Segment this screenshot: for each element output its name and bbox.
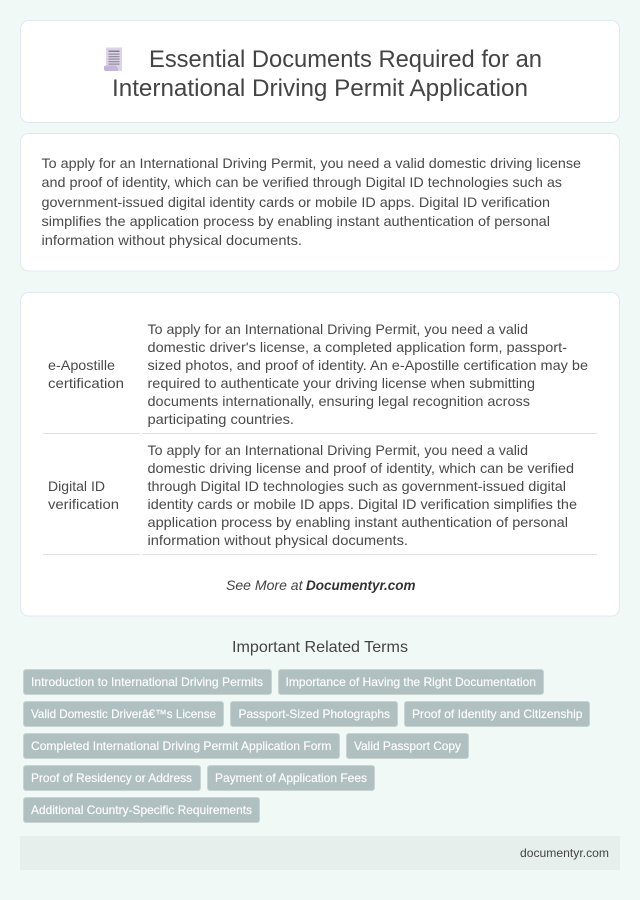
row label: e-Apostille certification xyxy=(48,357,124,391)
tag xyxy=(24,670,272,694)
tag xyxy=(346,734,468,758)
row label: Digital ID verification xyxy=(48,478,119,512)
tag: Valid Passport Copy xyxy=(354,739,461,753)
row description: e-Apostille certification: participating countries. xyxy=(148,411,294,427)
panel: summary paragraph xyxy=(20,134,620,271)
tag: Additional Country-Specific Requirements xyxy=(31,803,252,817)
tag list: related terms xyxy=(24,670,590,822)
icon: document scroll xyxy=(104,48,122,71)
tag: Introduction to International Driving Permits xyxy=(31,675,263,689)
row description: Digital ID verification xyxy=(148,442,577,548)
tag: Importance of Having the Right Documentation xyxy=(286,675,536,689)
panel: title header xyxy=(20,20,620,122)
row description: e-Apostille certification: required to authenticate your driving license when submitting xyxy=(148,375,535,391)
row description: e-Apostille certification: domestic driver's license, a completed application form, passport- xyxy=(148,339,567,355)
row description: Digital ID verification: To apply for an International Driving Permit, you need a valid xyxy=(148,442,528,458)
row description: Digital ID verification: domestic driving license and proof of identity, which can be verified xyxy=(148,460,574,476)
table row: Digital ID verification xyxy=(43,442,597,555)
tag xyxy=(24,734,340,758)
row label: e-Apostille certification: certification xyxy=(48,375,124,391)
row label: Digital ID verification: Digital ID xyxy=(48,478,105,494)
tag: Completed International Driving Permit Application Form xyxy=(31,739,331,753)
tag xyxy=(230,702,398,726)
tag xyxy=(278,670,544,694)
heading: Important Related Terms: Important Related Terms xyxy=(232,639,408,656)
text block: summary: and proof of identity, which can be verified through Digital ID technologies such as xyxy=(42,174,562,190)
tag: Valid Domestic Driverâ€™s License xyxy=(31,707,216,721)
see more link: Documentyr.com xyxy=(306,577,416,593)
text block: summary: simplifies the application process by enabling instant authentication of personal xyxy=(42,213,550,229)
panel: document table xyxy=(20,292,620,616)
tag xyxy=(24,798,260,822)
text block: summary xyxy=(42,155,581,248)
footer xyxy=(20,836,620,870)
footer: documentyr.com xyxy=(520,846,609,860)
tag: Proof of Residency or Address xyxy=(31,771,192,785)
tag: Proof of Identity and Citizenship xyxy=(412,707,583,721)
tag xyxy=(24,702,224,726)
row label: e-Apostille certification: e-Apostille xyxy=(48,357,115,373)
title xyxy=(112,46,542,102)
row description: Digital ID verification: through Digital ID technologies such as government-issued digital xyxy=(148,478,566,494)
row description: e-Apostille certification xyxy=(148,321,588,427)
text block: summary: To apply for an International Driving Permit, you need a valid domestic driving license xyxy=(42,155,581,171)
row description: Digital ID verification: application process by enabling instant authentication of personal xyxy=(148,514,568,530)
see more link: See More at xyxy=(226,577,304,593)
row description: e-Apostille certification: To apply for an International Driving Permit, you need a valid xyxy=(148,321,528,337)
row description: Digital ID verification: identity cards or mobile ID apps. Digital ID verification simplifies the xyxy=(148,496,577,512)
title: Essential Documents Required for an xyxy=(149,46,542,73)
tag: Passport-Sized Photographs xyxy=(238,707,390,721)
text block: summary: government-issued digital identity cards or mobile ID apps. Digital ID verification xyxy=(42,194,550,210)
row description: Digital ID verification: information without physical documents. xyxy=(148,532,408,548)
see more link xyxy=(226,577,416,593)
row label: Digital ID verification: verification xyxy=(48,496,119,512)
tag xyxy=(24,766,200,790)
row description: e-Apostille certification: sized photos, and proof of identity. An e-Apostille certification may be xyxy=(148,357,588,373)
row description: e-Apostille certification: documents internationally, ensuring legal recognition across xyxy=(148,393,530,409)
table row: e-Apostille certification xyxy=(43,321,597,434)
title: International Driving Permit Application xyxy=(112,75,528,102)
tag: Payment of Application Fees xyxy=(215,771,367,785)
tag xyxy=(404,702,590,726)
tag xyxy=(208,766,374,790)
text block: summary: information without physical documents. xyxy=(42,232,302,248)
